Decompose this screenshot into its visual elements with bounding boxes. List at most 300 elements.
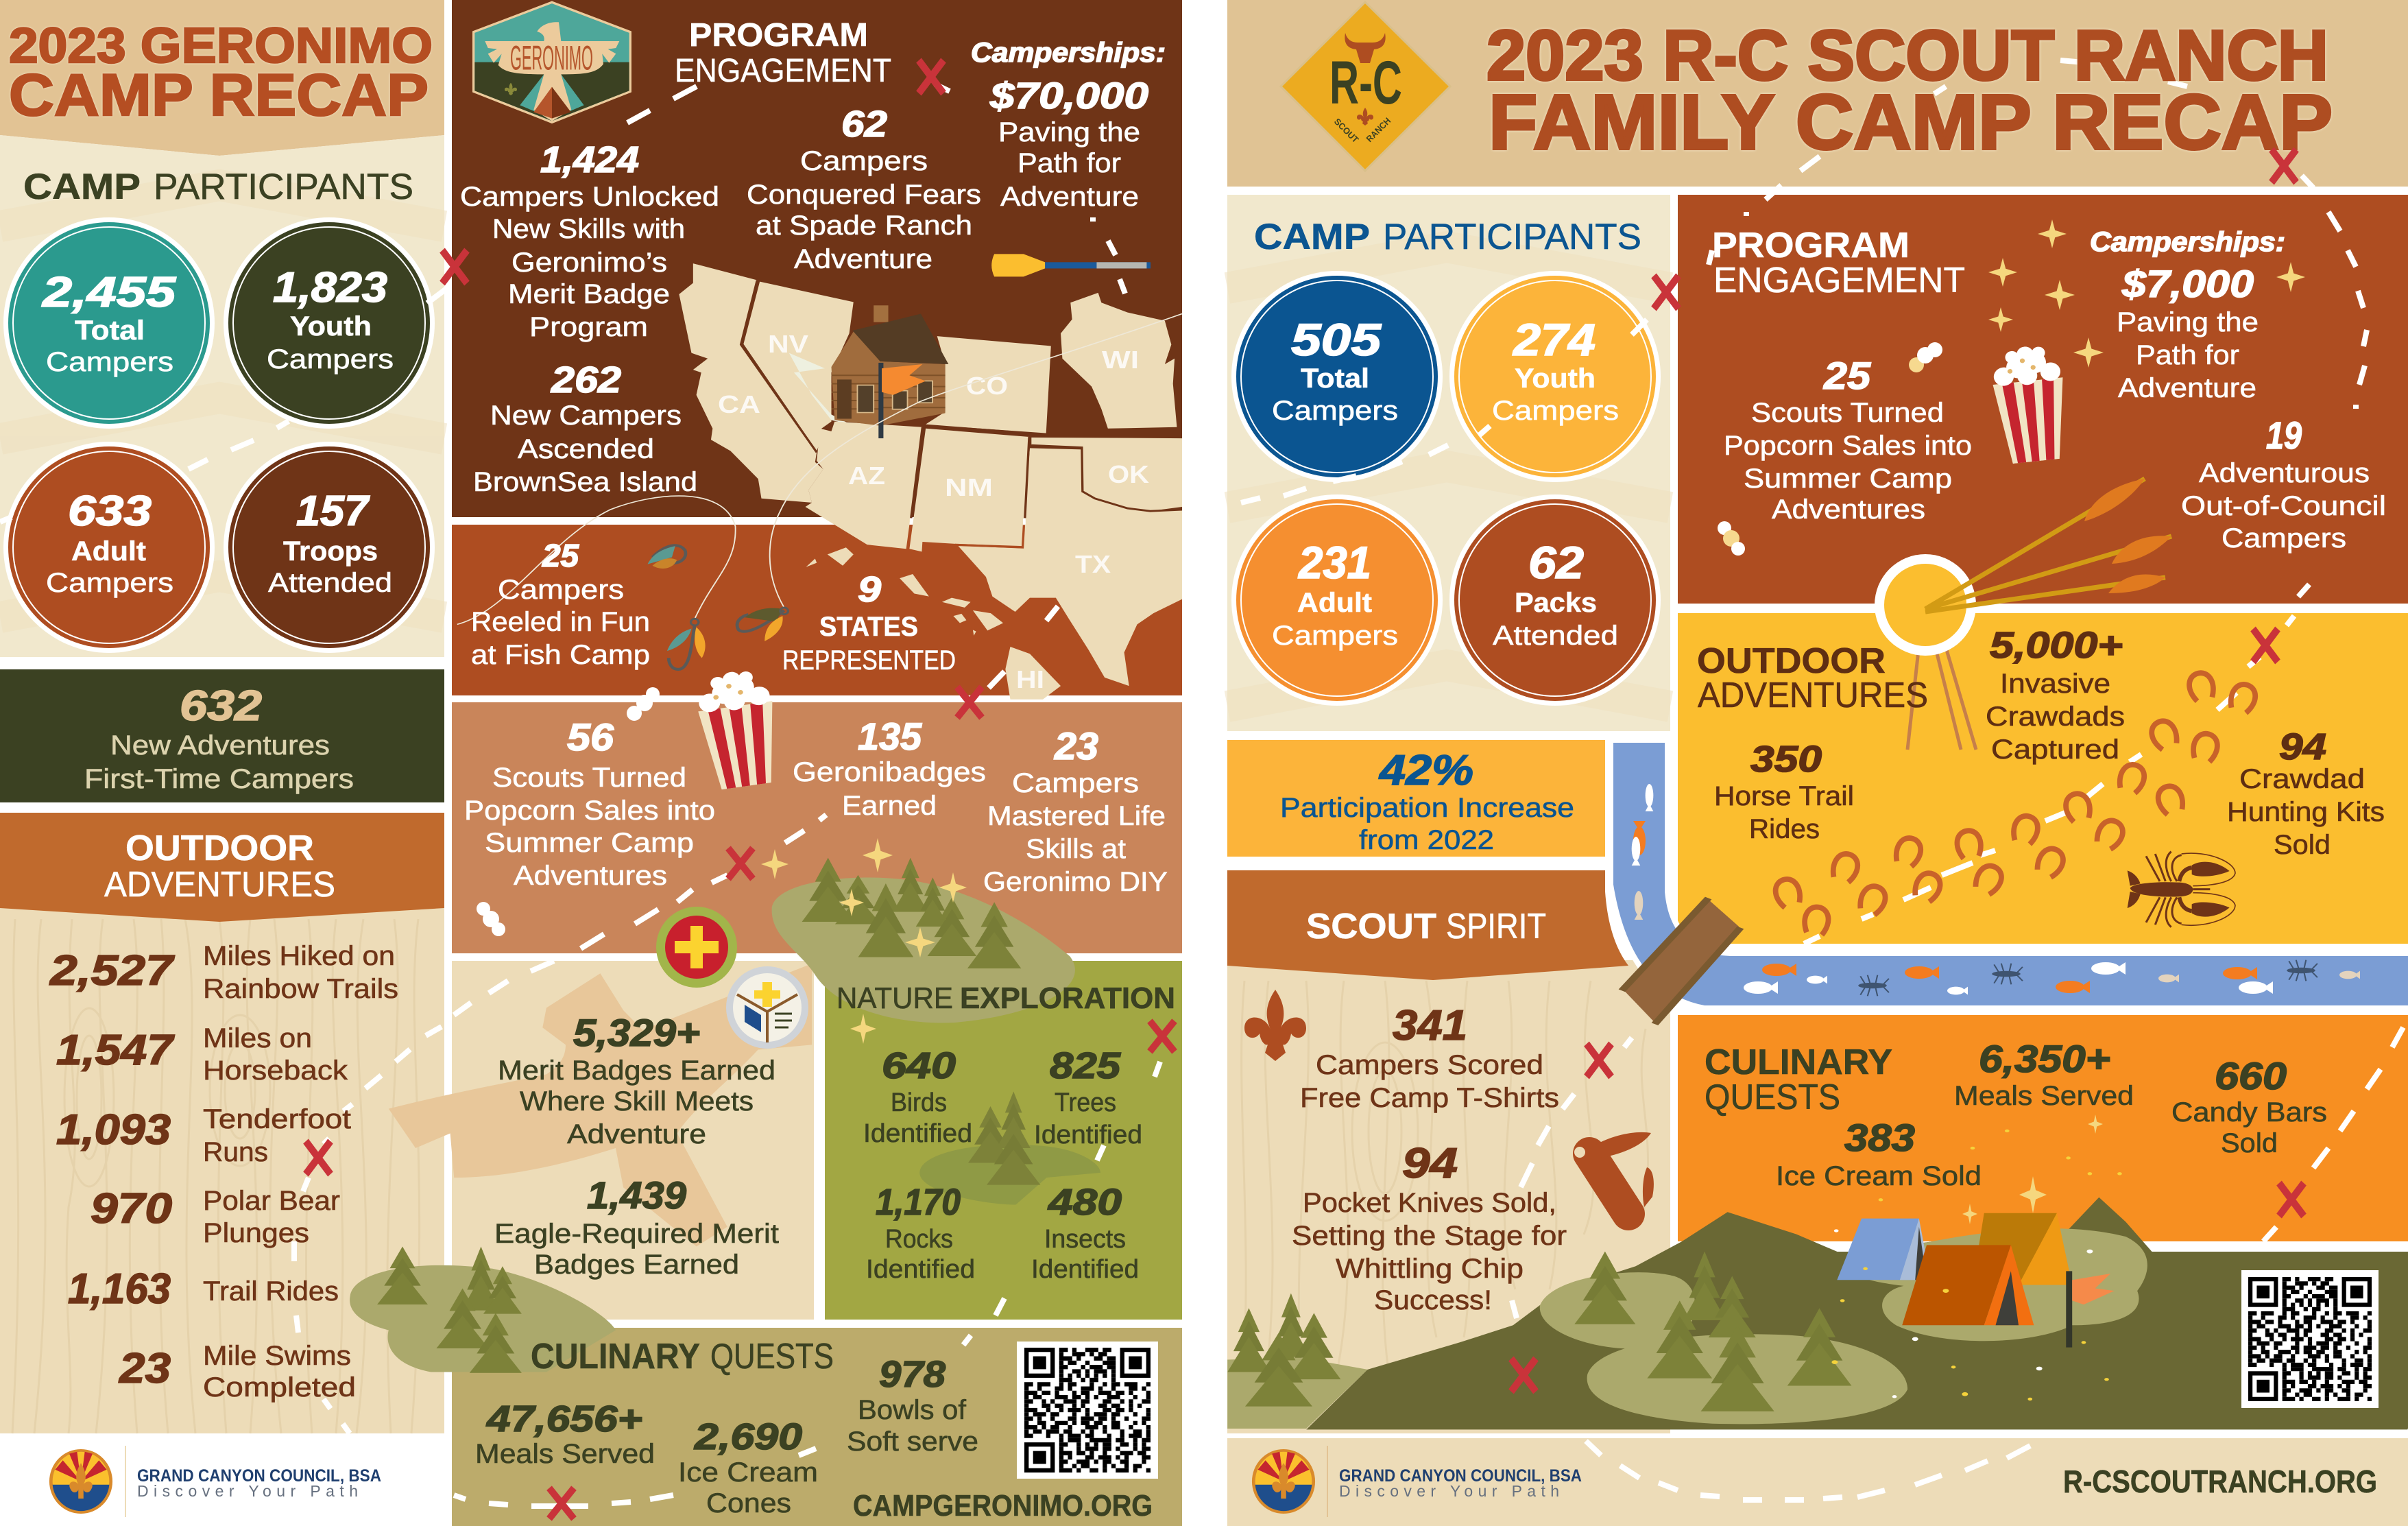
panel: participation increase xyxy=(1227,740,1605,857)
heading: culinary quests: QUESTS xyxy=(710,1337,834,1376)
stat circle: troops attended xyxy=(224,442,435,653)
heading: outdoor adventures: ADVENTURES xyxy=(1698,676,1928,715)
stat circle: packs attended: Packs xyxy=(1515,588,1597,618)
text: popcorn sales xyxy=(1724,354,1972,525)
stat circle: adult campers: 633 xyxy=(68,488,152,535)
stat list: outdoor adventures: 1,163 xyxy=(68,1265,171,1313)
panel: scout spirit wood background xyxy=(1227,960,1670,1433)
panel: right camp participants background xyxy=(1227,195,1670,731)
text: crawdad hunting kits: Hunting Kits xyxy=(2227,797,2385,827)
text: merit badges earned: Adventure xyxy=(567,1119,706,1149)
text: popcorn sales: Scouts Turned xyxy=(1751,398,1944,428)
stat list: outdoor adventures: Polar Bear xyxy=(203,1186,340,1216)
text: geronimo diy: Mastered Life xyxy=(987,801,1166,831)
stat list: outdoor adventures: Mile Swims xyxy=(203,1341,351,1371)
text: out-of-council campers: Adventurous xyxy=(2199,458,2370,488)
callout: camperships: Camperships: xyxy=(971,38,1166,68)
stats: culinary quests: 383 xyxy=(1844,1116,1915,1159)
text: popcorn sales: Popcorn Sales into xyxy=(1724,431,1972,461)
stat list: outdoor adventures: Miles Hiked on xyxy=(203,941,395,971)
trail: left participants dashes xyxy=(0,289,446,522)
text: merit badge program: Merit Badge xyxy=(508,279,670,309)
icon: first aid badge xyxy=(656,907,737,988)
stats: culinary quests xyxy=(475,1354,978,1518)
text: first-time campers: First-Time Campers xyxy=(84,764,354,794)
text: out-of-council campers: Out-of-Council xyxy=(2181,491,2386,521)
stat circle: total campers xyxy=(3,217,215,429)
title: 2023 R-C scout ranch family camp recap xyxy=(1486,16,2333,165)
stat circle: troops attended: 157 xyxy=(296,488,370,535)
stat circle: adult campers xyxy=(3,442,215,653)
stat circle: youth campers: 274 xyxy=(1512,314,1596,365)
panel: first-time campers band xyxy=(0,669,444,802)
map state labels: CO xyxy=(966,372,1008,400)
text: participation increase: Participation Increase xyxy=(1280,793,1574,823)
heading: camp participants: PARTICIPANTS xyxy=(1383,217,1641,257)
panel: nature exploration xyxy=(825,961,1182,1320)
heading: scout spirit xyxy=(1306,907,1546,946)
stats: nature exploration: 825 xyxy=(1050,1045,1121,1086)
panel: right footer xyxy=(1227,1438,2408,1526)
stat circle: youth campers: Youth xyxy=(290,311,372,342)
stats: nature exploration: Rocks xyxy=(885,1225,953,1254)
text: geronimo diy: Skills at xyxy=(1026,834,1126,864)
text: states represented: 9 xyxy=(858,570,881,610)
icon: oar xyxy=(991,254,1151,276)
panel: right program engagement xyxy=(1678,195,2408,604)
text: spade ranch: Conquered Fears xyxy=(747,180,981,210)
text: states represented xyxy=(782,570,956,676)
trail: left poster xyxy=(294,84,1160,1506)
stat circle: adult campers: Adult xyxy=(1297,588,1372,618)
icons: river fish xyxy=(1632,784,2360,996)
callout: camperships: Paving the xyxy=(998,117,1140,147)
heading: outdoor adventures: OUTDOOR xyxy=(1697,641,1886,681)
panel: outdoor adventures header ribbon xyxy=(0,813,444,922)
text: crawdad hunting kits: Crawdad xyxy=(2239,764,2365,794)
map state labels: OK xyxy=(1108,460,1149,488)
heading: culinary quests: QUESTS xyxy=(1705,1077,1840,1117)
text: geronibadges: Earned xyxy=(842,791,937,821)
stat circle: adult campers: Adult xyxy=(71,536,146,567)
stat circle: youth campers xyxy=(224,217,435,429)
text: camp t-shirts: 341 xyxy=(1393,1002,1467,1049)
stat circle: troops attended: Attended xyxy=(268,568,392,598)
text: out-of-council campers: Campers xyxy=(2222,523,2346,553)
text: popcorn sales: Adventures xyxy=(514,861,667,891)
text: out-of-council campers: 19 xyxy=(2266,414,2302,457)
stat list: outdoor adventures: Horseback xyxy=(203,1056,348,1086)
text: merit badge program: New Skills with xyxy=(492,214,685,244)
fishing lines xyxy=(457,314,1182,624)
panel: scout spirit header ribbon xyxy=(1227,870,1628,980)
text: spade ranch: at Spade Ranch xyxy=(756,211,972,241)
heading: nature exploration xyxy=(836,981,1175,1015)
stats: culinary quests: 660 xyxy=(2215,1054,2287,1097)
text: pocket knives: 94 xyxy=(1402,1140,1458,1187)
stat circle: total campers: Total xyxy=(75,315,145,346)
text: spade ranch: Adventure xyxy=(794,244,932,274)
red x markers: left poster xyxy=(306,60,1175,1518)
map state labels: CA xyxy=(718,390,760,418)
stat circle: total campers: 505 xyxy=(1291,314,1382,365)
stat list: outdoor adventures: Tenderfoot xyxy=(203,1104,351,1134)
heading: culinary quests: CULINARY xyxy=(531,1337,700,1376)
text: eagle-required badges: 1,439 xyxy=(587,1173,686,1217)
text: popcorn sales: Adventures xyxy=(1772,494,1925,525)
heading: camp participants xyxy=(1254,217,1641,257)
stat list: outdoor adventures: Miles on xyxy=(203,1023,312,1053)
stats: nature exploration: Identified xyxy=(1031,1255,1139,1284)
heading: program engagement: PROGRAM xyxy=(689,17,868,53)
heading: culinary quests xyxy=(1705,1042,1892,1117)
stat list: outdoor adventures: 1,093 xyxy=(56,1106,171,1154)
heading: outdoor adventures: ADVENTURES xyxy=(104,865,335,905)
stats: culinary quests: Meals Served xyxy=(475,1439,655,1469)
stat list: outdoor adventures xyxy=(49,941,398,1403)
icon: archery target with arrows xyxy=(1875,479,2171,750)
text: popcorn sales: Popcorn Sales into xyxy=(464,796,715,826)
panel: popcorn and badges xyxy=(452,702,1182,953)
icon: popcorn kernels xyxy=(1718,342,1942,556)
stats: culinary quests: 978 xyxy=(879,1354,946,1395)
text: pocket knives: Whittling Chip xyxy=(1336,1254,1524,1284)
footer: right Grand Canyon Council: Discover Your Path xyxy=(1339,1482,1559,1500)
callout: camperships: Camperships: xyxy=(2090,227,2285,257)
stat circle: packs attended xyxy=(1449,494,1661,706)
text: brownsea island: 262 xyxy=(551,359,621,401)
panel: left culinary quests xyxy=(452,1328,1182,1526)
stat circle: adult campers: 231 xyxy=(1297,537,1371,588)
text: spade ranch: Campers xyxy=(800,146,928,176)
text: horse trail rides xyxy=(1714,739,1854,844)
text: fish camp: 25 xyxy=(542,538,579,573)
icons: camp stars xyxy=(1962,1114,2103,1224)
stats: nature exploration: Birds xyxy=(891,1088,947,1117)
icon: fleur-de-lis xyxy=(1244,990,1306,1061)
stat circle: adult campers: Campers xyxy=(1272,621,1398,651)
stat list: outdoor adventures: 23 xyxy=(119,1345,171,1392)
text: popcorn sales xyxy=(464,715,715,891)
heading: nature exploration: NATURE xyxy=(836,981,953,1015)
text: first-time campers xyxy=(84,682,354,794)
eagle silhouette xyxy=(389,964,812,1247)
text: pocket knives: Success! xyxy=(1374,1285,1492,1315)
logo: R-C scout ranch diamond: RANCH xyxy=(1364,115,1393,144)
panel: left camp participants background xyxy=(0,135,444,657)
text: crawdad hunting kits: Sold xyxy=(2274,830,2331,860)
footer: left Grand Canyon Council xyxy=(49,1446,381,1517)
text: horse trail rides: Rides xyxy=(1749,814,1820,844)
heading: nature exploration: EXPLORATION xyxy=(960,981,1175,1015)
stat list: outdoor adventures: Completed xyxy=(203,1372,356,1403)
text: crawdad hunting kits: 94 xyxy=(2279,726,2326,767)
text: participation increase xyxy=(1280,747,1574,855)
text: geronimo diy: Campers xyxy=(1012,768,1139,798)
stat circle: youth campers: Campers xyxy=(1492,396,1619,426)
text: horse trail rides: Horse Trail xyxy=(1714,781,1854,811)
title: 2023 R-C scout ranch family camp recap: 2023 R-C SCOUT RANCH xyxy=(1486,16,2328,95)
text: popcorn sales: 25 xyxy=(1823,354,1871,397)
text: popcorn sales: Summer Camp xyxy=(1744,464,1952,494)
text: invasive crawdads xyxy=(1986,625,2125,765)
panel: olive hills band xyxy=(1678,1252,2408,1429)
stat circle: total campers: Total xyxy=(1301,363,1369,394)
stats: nature exploration: Insects xyxy=(1044,1225,1126,1254)
panel: right culinary quests xyxy=(1678,1015,2408,1241)
text: geronimo diy: Geronimo DIY xyxy=(983,867,1168,897)
stats: culinary quests: Meals Served xyxy=(1954,1081,2134,1111)
stats: culinary quests: Ice Cream Sold xyxy=(1776,1161,1982,1191)
stats: culinary quests: Ice Cream xyxy=(678,1457,818,1488)
icon: popcorn kernels xyxy=(477,687,660,936)
qr code: left xyxy=(1017,1342,1158,1479)
map state labels: NV xyxy=(768,330,808,358)
heading: culinary quests: CULINARY xyxy=(1705,1042,1892,1082)
panel: fish camp and states xyxy=(452,525,1182,695)
map state labels: WI xyxy=(1102,346,1139,374)
icon: log bridge xyxy=(1622,898,1741,1024)
text: first-time campers: 632 xyxy=(180,682,262,730)
footer: left Grand Canyon Council: GRAND CANYON COUNCIL, BSA xyxy=(137,1466,381,1486)
text: merit badge program: Geronimo’s xyxy=(511,248,667,278)
text: geronibadges: Geronibadges xyxy=(793,757,986,787)
text: brownsea island xyxy=(473,359,697,497)
illustration: hills, forest and camp xyxy=(1227,1130,2407,1429)
logo: R-C scout ranch diamond: SCOUT xyxy=(1332,117,1361,145)
text: merit badge program: Campers Unlocked xyxy=(460,182,719,212)
text: pocket knives xyxy=(1292,1140,1567,1315)
stat list: outdoor adventures: 1,547 xyxy=(56,1027,175,1074)
callout: camperships: Path for xyxy=(1018,148,1121,178)
icon: merit badge emblem xyxy=(726,966,808,1049)
text: states represented: STATES xyxy=(819,612,918,642)
footer: left Grand Canyon Council: Discover Your Path xyxy=(137,1482,358,1500)
icon: crawdad xyxy=(2128,852,2235,927)
stats: culinary quests: Cones xyxy=(706,1488,791,1518)
text: geronibadges xyxy=(793,715,986,821)
callout: camperships: Paving the xyxy=(2117,307,2259,337)
footer: right Grand Canyon Council xyxy=(1252,1446,1582,1517)
stats: culinary quests xyxy=(1776,1037,2327,1191)
icon: pocket knife xyxy=(1574,1132,1654,1214)
stat circle: packs attended: 62 xyxy=(1528,537,1584,588)
icons: stars xyxy=(761,838,967,1044)
text: states represented: REPRESENTED xyxy=(782,645,956,676)
heading: program engagement xyxy=(675,17,891,89)
text: camp t-shirts: Free Camp T-Shirts xyxy=(1300,1083,1559,1113)
stats: nature exploration: 480 xyxy=(1048,1182,1122,1223)
text: eagle-required badges: Eagle-Required Merit xyxy=(494,1219,779,1249)
icons: horseshoe trail xyxy=(1772,670,2259,935)
heading: camp participants xyxy=(23,167,413,207)
stat circle: adult campers: Campers xyxy=(46,568,173,598)
text: first-time campers: New Adventures xyxy=(110,730,330,761)
heading: program engagement: ENGAGEMENT xyxy=(1713,261,1965,300)
text: merit badge program: Program xyxy=(529,312,648,342)
text: eagle-required badges: Badges Earned xyxy=(534,1250,739,1280)
text: spade ranch xyxy=(747,104,981,274)
stat list: outdoor adventures: 2,527 xyxy=(49,947,175,994)
stats: culinary quests: Candy Bars xyxy=(2171,1097,2327,1128)
trail: right participants dashes xyxy=(1241,320,1647,503)
stat circle: adult campers xyxy=(1231,494,1443,706)
map state labels: AZ xyxy=(848,462,885,490)
text: merit badges earned: Where Skill Meets xyxy=(520,1086,754,1117)
illustration: forest hill on terracotta xyxy=(772,858,1075,1023)
logo: Geronimo badge xyxy=(474,2,630,122)
stats: nature exploration: 1,170 xyxy=(876,1182,961,1223)
title: 2023 Geronimo camp recap xyxy=(9,19,433,128)
map state labels xyxy=(718,330,1149,693)
text: camp t-shirts: Campers Scored xyxy=(1316,1050,1543,1080)
heading: culinary quests xyxy=(531,1337,834,1376)
text: fish camp: Campers xyxy=(498,575,624,605)
stat circle: youth campers xyxy=(1449,271,1661,482)
text: brownsea island: BrownSea Island xyxy=(473,467,697,497)
heading: outdoor adventures: OUTDOOR xyxy=(125,828,314,868)
text: merit badges earned xyxy=(498,1011,775,1149)
stat circle: total campers xyxy=(1231,271,1443,482)
heading: program engagement xyxy=(1712,226,1965,300)
stat circle: packs attended: Attended xyxy=(1493,621,1618,651)
stats: nature exploration: 640 xyxy=(882,1045,956,1086)
heading: scout spirit: SPIRIT xyxy=(1446,907,1546,946)
stats: culinary quests: Soft serve xyxy=(847,1427,978,1457)
stats: culinary quests: Bowls of xyxy=(858,1395,967,1425)
icons: stars xyxy=(1988,219,2305,368)
text: brownsea island: Ascended xyxy=(518,434,654,464)
stat list: outdoor adventures: Trail Rides xyxy=(203,1276,339,1307)
river xyxy=(1611,740,2408,1008)
text: brownsea island: New Campers xyxy=(490,401,682,431)
stat circle: youth campers: 1,823 xyxy=(273,264,387,311)
illustration: nature trees xyxy=(919,1091,1100,1205)
panel: merit badges xyxy=(452,961,814,1320)
illustration: forest hill on left poster xyxy=(350,1247,616,1373)
stats: culinary quests: Sold xyxy=(2221,1128,2278,1158)
heading: program engagement: PROGRAM xyxy=(1712,226,1910,265)
text: popcorn sales: 56 xyxy=(567,715,614,759)
map state labels: HI xyxy=(1016,665,1044,693)
panel: right outdoor adventures xyxy=(1678,613,2408,944)
stats: nature exploration: Identified xyxy=(866,1255,975,1284)
stat circle: youth campers: Youth xyxy=(1515,363,1596,394)
stat circle: total campers: Campers xyxy=(1272,396,1398,426)
title: 2023 Geronimo camp recap: CAMP RECAP xyxy=(9,62,429,128)
text: geronibadges: 135 xyxy=(858,715,922,758)
stats: culinary quests: 47,656+ xyxy=(486,1398,642,1440)
stats: culinary quests: 6,350+ xyxy=(1979,1037,2110,1080)
text: popcorn sales: Scouts Turned xyxy=(492,763,686,793)
callout: camperships: Adventure xyxy=(2118,373,2256,403)
callout: camperships: Adventure xyxy=(1000,182,1139,212)
text: camp t-shirts xyxy=(1300,1002,1559,1113)
text: invasive crawdads: Invasive xyxy=(2000,669,2110,699)
text: eagle-required badges xyxy=(494,1173,779,1280)
stat circle: total campers: 2,455 xyxy=(42,269,177,316)
icon: cabin with flag xyxy=(825,305,948,438)
text: merit badges earned: Merit Badges Earned xyxy=(498,1056,775,1086)
trail: right poster xyxy=(1512,60,2403,1500)
stat list: outdoor adventures: Plunges xyxy=(203,1218,309,1248)
text: merit badge program: 1,424 xyxy=(540,139,639,180)
icon: popcorn box xyxy=(693,667,784,791)
text: invasive crawdads: Captured xyxy=(1991,735,2119,765)
stat list: outdoor adventures: Runs xyxy=(203,1137,268,1167)
text: geronimo diy xyxy=(983,724,1168,897)
callout: camperships: $7,000 xyxy=(2121,262,2254,305)
text: participation increase: from 2022 xyxy=(1359,825,1494,855)
text: geronimo diy: 23 xyxy=(1054,724,1098,767)
stat circle: troops attended: Troops xyxy=(283,536,378,567)
heading: camp participants: CAMP xyxy=(1254,217,1370,257)
text: invasive crawdads: 5,000+ xyxy=(1990,625,2123,666)
text: fish camp: at Fish Camp xyxy=(471,640,650,670)
logo: R-C scout ranch diamond: R-C xyxy=(1329,48,1402,117)
icons: fishing flies xyxy=(647,545,788,669)
panel: right title band xyxy=(1227,0,2408,187)
stats: nature exploration: Identified xyxy=(1034,1121,1142,1149)
text: invasive crawdads: Crawdads xyxy=(1986,702,2125,732)
callout: camperships xyxy=(971,38,1166,212)
panel: left program engagement xyxy=(452,0,1182,517)
text: pocket knives: Setting the Stage for xyxy=(1292,1221,1567,1251)
stats: culinary quests: 2,690 xyxy=(694,1416,802,1457)
text: fish camp: Reeled in Fun xyxy=(471,607,650,637)
text: participation increase: 42% xyxy=(1378,747,1473,794)
stat circle: youth campers: Campers xyxy=(267,344,394,374)
text: merit badge program xyxy=(460,139,719,342)
text: merit badges earned: 5,329+ xyxy=(573,1011,700,1054)
heading: program engagement: ENGAGEMENT xyxy=(675,53,891,89)
panel: left outdoor adventures wood background xyxy=(0,892,444,1433)
map: western states xyxy=(679,263,1182,700)
text: pocket knives: Pocket Knives Sold, xyxy=(1303,1188,1556,1218)
text: popcorn sales: Summer Camp xyxy=(485,828,694,858)
logo: R-C scout ranch diamond xyxy=(1281,2,1450,171)
panel: left title band xyxy=(0,0,444,156)
heading: scout spirit: SCOUT xyxy=(1306,907,1436,946)
text: crawdad hunting kits xyxy=(2227,726,2385,860)
stat list: outdoor adventures: 970 xyxy=(91,1185,172,1232)
callout: camperships: $70,000 xyxy=(989,75,1148,117)
text: spade ranch: 62 xyxy=(841,104,887,145)
map state labels: TX xyxy=(1075,550,1111,578)
heading: camp participants: PARTICIPANTS xyxy=(154,167,413,207)
stat list: outdoor adventures: Rainbow Trails xyxy=(203,974,398,1004)
heading: outdoor adventures xyxy=(104,828,335,905)
stats: nature exploration: Identified xyxy=(863,1119,972,1148)
callout: camperships xyxy=(2090,227,2285,403)
stats: nature exploration: Trees xyxy=(1055,1088,1116,1117)
logo: Geronimo badge: GERONIMO xyxy=(510,39,593,78)
heading: camp participants: CAMP xyxy=(23,167,141,207)
stat circle: total campers: Campers xyxy=(46,347,173,377)
text: fish camp xyxy=(471,538,650,670)
map state labels: NM xyxy=(945,473,993,501)
callout: camperships: Path for xyxy=(2136,340,2239,370)
url: campgeronimo: CAMPGERONIMO.ORG xyxy=(853,1489,1153,1523)
icon: popcorn box xyxy=(1989,343,2071,465)
text: horse trail rides: 350 xyxy=(1750,739,1822,780)
stats: nature exploration xyxy=(863,1045,1142,1284)
title: 2023 R-C scout ranch family camp recap: FAMILY CAMP RECAP xyxy=(1489,79,2333,165)
text: out-of-council campers xyxy=(2181,414,2386,553)
title: 2023 Geronimo camp recap: 2023 GERONIMO xyxy=(9,19,433,73)
qr code: right xyxy=(2241,1270,2379,1408)
heading: outdoor adventures xyxy=(1697,641,1928,715)
